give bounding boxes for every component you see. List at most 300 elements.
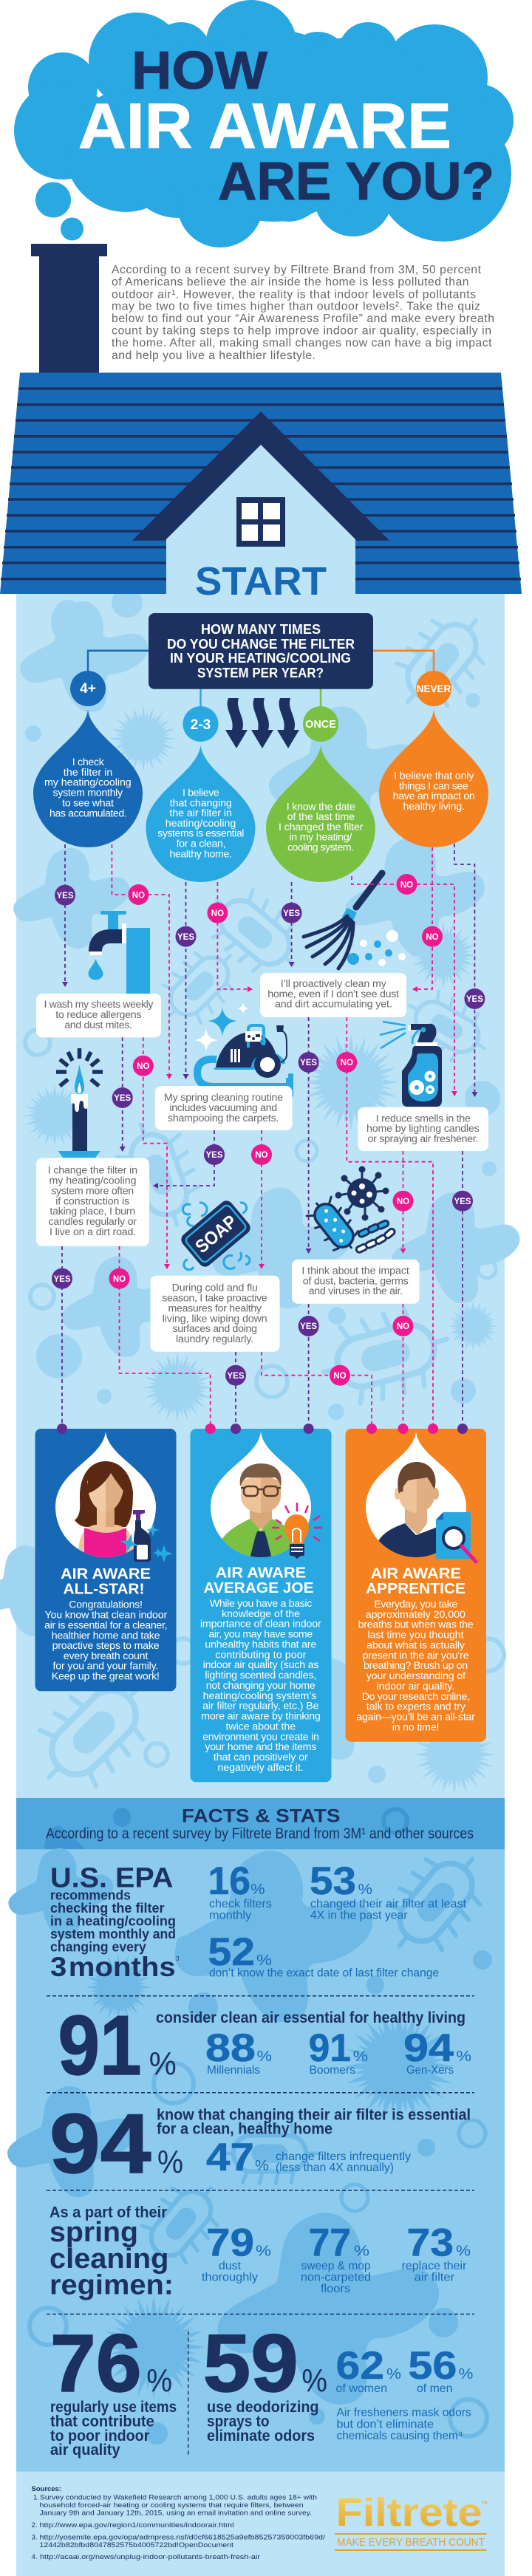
connector: 2-3 no [217,882,252,989]
stat: gen-xers: 94 [403,2026,454,2070]
stat: 77 percent sweep: 77 [309,2221,351,2264]
connector end dots [57,1424,468,1434]
panel: air aware all-star: healthier home and take [52,1630,160,1641]
stat: 94 percent know changing filter is essential: % [157,2144,183,2180]
badge: yes proactive [299,1052,319,1073]
card: change filter more often: taking place, I burn [50,1206,135,1217]
icon: man with glasses [222,1463,291,1557]
stat: 53 percent: % [358,1882,372,1898]
stat: millennials: 88 [205,2026,256,2070]
badge: no cold and flu: NO [333,1372,347,1381]
stat: women and men: of men [417,2382,452,2395]
card: wash sheets: and dust mites. [64,1019,132,1031]
stat: boomers: Boomers [309,2064,355,2077]
stat: women and men: 56 [408,2344,457,2388]
stat: 77 percent sweep: floors [321,2283,350,2295]
intro text: According to a recent survey by Filtrete Brand from 3M, 50 percent [112,264,482,276]
flow: 4+: to see what [62,797,114,809]
panel: air aware average joe: air, you may have some [208,1629,313,1641]
panel: air aware average joe: contributing to poor [215,1649,307,1661]
question box [149,613,373,689]
sources: 2. [31,2521,38,2529]
stat: 94 percent know changing filter is essential: 94 [50,2097,151,2191]
panel: air aware apprentice: APPRENTICE [366,1581,466,1597]
flow: never: have an impact on [393,790,475,802]
flow: never: I believe that only [394,770,474,782]
badge: yes filter often: YES [53,1275,71,1284]
stat: 79 percent dust: % [256,2243,271,2259]
badge: no proactive [336,1052,357,1073]
stat: 79 percent dust: 79 [206,2221,254,2264]
card: proactively clean [260,973,406,1017]
cloud puff: small [61,217,83,241]
stat: 73 percent replace: air filter [415,2271,455,2284]
flow: once: of the last time [287,811,355,823]
question box: DO YOU CHANGE THE FILTER [167,636,355,652]
flow: never: NEVER [417,683,451,694]
panel: air aware average joe [191,1429,331,1782]
stat: 59 percent: 59 [203,2318,299,2409]
connector: smells no [402,1151,403,1253]
flow: never: healthy living. [403,801,465,813]
panel: air aware average joe: twice about the [226,1721,296,1732]
panel: air aware average joe: lighting scented candles, [205,1670,316,1681]
panel: air aware average joe: heating/cooling system’s [203,1690,316,1702]
stat: women and men: but don’t eliminate [337,2418,434,2430]
stat: epa recommendation: in a heating/cooling [50,1914,176,1929]
badge: no cold and flu [330,1365,350,1386]
badge: yes sheets [112,1087,133,1108]
badge: yes 4+ [55,885,75,906]
intro text: of Americans believe the air inside the home is less polluted than [112,276,468,289]
card: reduce smells: I reduce smells in the [376,1113,471,1125]
stat: women and men: % [459,2366,474,2382]
question box: HOW MANY TIMES [201,621,321,637]
card: cold and flu: During cold and flu [172,1282,258,1294]
badge: no spring [251,1144,272,1165]
stat: gen-xers [403,2026,471,2077]
panel: air aware average joe: environment you create in [202,1731,319,1743]
stat: 91 percent consider clean air essential: % [149,2046,177,2082]
flow: 4+: has accumulated. [50,807,127,819]
panel: air aware apprentice [346,1429,486,1742]
panel: air aware all-star: You know that clean indoor [44,1610,167,1622]
card: think about impact: of dust, bacteria, germs [303,1275,409,1287]
stat: 79 percent dust: thoroughly [202,2271,258,2284]
panel: air aware apprentice: talk to experts and try [366,1701,466,1713]
stat: 53 percent: 4X in the past year [310,1910,408,1922]
stat: 91 percent consider clean air essential [58,1999,471,2093]
card: reduce smells: or spraying air freshener. [368,1133,479,1145]
stat: gen-xers: % [457,2049,471,2065]
panel: air aware average joe: not changing your home [206,1680,316,1692]
stat: 47 percent: 47 [206,2136,254,2179]
panel: air aware all-star: for you and your family. [53,1661,158,1673]
flow: 2-3: 2-3 [191,717,211,733]
flow: 4+: system monthly [53,788,123,799]
start label: START [195,559,327,604]
connector: think no [402,1304,403,1428]
icon: soap: SOAP [191,1211,241,1257]
stat: epa recommendation: checking the filter [50,1901,165,1916]
flow: never: things I can see [399,780,468,792]
panel: air aware apprentice: breathing? Brush up on [364,1660,468,1672]
card: change filter more often: my heating/cooling [49,1175,136,1187]
badge: yes spring [204,1144,225,1165]
panel: air aware average joe: indoor air quality (such as [203,1659,319,1671]
stat: 47 percent: change filters infrequently [276,2150,411,2163]
card: spring cleaning: includes vacuuming and [169,1102,277,1114]
panel: air aware apprentice: in no time! [392,1721,439,1733]
icon: young man [378,1462,439,1557]
icon: document and magnifier [436,1512,476,1562]
badge: no never [422,926,443,947]
panel: air aware all-star: AIR AWARE [61,1566,151,1582]
badge: yes think: YES [300,1322,317,1331]
stat: 16 percent: % [250,1882,265,1898]
stat: 59 percent: % [301,2363,327,2399]
badge: no 4+: NO [132,891,145,900]
flow: once: I changed the filter [279,821,364,833]
card: cold and flu: laundry regularly. [176,1333,253,1345]
stat: 76 percent: to poor indoor [50,2428,149,2445]
stat: boomers: % [353,2049,368,2065]
badge: no spring: NO [255,1151,268,1160]
card: proactively clean: I’ll proactively clean my [281,978,387,990]
panel: air aware all-star [35,1429,176,1691]
stat: 77 percent sweep: % [354,2243,369,2259]
stat: 94 percent know changing filter is essential: for a clean, healthy home [157,2120,332,2137]
flow: once: in my heating/ [289,832,352,844]
card: wash sheets: I wash my sheets weekly [44,999,154,1011]
connector: cold and flu no [262,1352,372,1428]
card: cold and flu: surfaces and doing [173,1323,257,1335]
stats background germs [7,1836,500,2445]
stat: 52 percent: don’t know the exact date of last filter change [209,1967,439,1980]
title: ARE YOU? [218,152,494,211]
panel: air aware average joe: knowledge of the [222,1608,300,1620]
sources: 12442b82bfbd8047852575b4005722bd!OpenDocument [40,2541,233,2549]
panel: air aware average joe: importance of clean indoor [200,1619,321,1630]
flow: once [266,706,375,882]
stat: 16 percent: 16 [208,1859,250,1903]
stat: epa recommendation [50,1862,180,1982]
connector: once yes [291,882,293,966]
flow: 2-3 [146,706,256,882]
card: reduce smells: home by lighting candles [366,1123,480,1135]
icon: broom [304,873,406,968]
connector: spring no [261,1130,262,1268]
flow: 4+: my heating/cooling [44,777,132,789]
icon: soap [179,1198,253,1270]
title [78,41,494,211]
stat: millennials: % [257,2049,272,2065]
panel: air aware apprentice: breaths but when was the [358,1619,474,1631]
connector: cold and flu yes [235,1352,236,1428]
stat: 47 percent: % [255,2158,269,2174]
panel: air aware all-star: proactive steps to make [52,1640,160,1652]
question box: SYSTEM PER YEAR? [197,665,324,680]
badge: yes smells: YES [454,1198,471,1206]
stat: 76 percent [50,2318,177,2459]
panel: air aware average joe: that can positively or [214,1752,308,1763]
connector: think yes [308,1304,310,1428]
stat: epa recommendation: system monthly and [50,1927,176,1941]
facts and stats band: According to a recent survey by Filtrete Brand from 3M¹ and other sources [46,1825,474,1842]
badge: no filter often [109,1268,130,1289]
stat: 52 percent: 52 [208,1930,255,1974]
badge: no never: NO [426,933,439,942]
badge: no think: NO [397,1322,409,1331]
stat: women and men: % [386,2366,401,2382]
icon: faucet [89,911,150,994]
intro text: may be two to five times higher than outdoor levels². Take the quiz [112,301,480,313]
panel: air aware all-star: ALL-STAR! [64,1582,145,1598]
connector: never no [413,847,432,989]
stat: 91 percent consider clean air essential: 91 [58,1999,142,2093]
panel: air aware all-star: Congratulations! [69,1599,143,1611]
stat: 53 percent: changed their air filter at least [310,1898,467,1910]
card: think about impact [292,1260,420,1304]
gable roof [132,411,389,541]
intro text: outdoor air¹. However, the reality is that indoor levels of pollutants [112,288,476,301]
stat: 94 percent know changing filter is essential [50,2097,471,2191]
connector: sheets no [143,1037,167,1268]
flow: 4+: the filter in [64,767,112,779]
stat: spring cleaning heading: cleaning [50,2244,168,2275]
flow: 2-3: systems is essential [157,828,244,840]
stat: 59 percent: sprays to [207,2413,269,2430]
flow: 4+: 4+ [80,681,96,697]
panel: air aware apprentice: Everyday, you take [374,1599,457,1610]
icon: wavy air arrows [225,698,299,748]
panel: stats background [16,1849,505,2472]
stat: 73 percent replace: 73 [406,2221,454,2264]
card: spring cleaning: My spring cleaning routine [164,1092,283,1104]
connector: proactive no [347,1017,433,1428]
panel: air aware apprentice: AIR AWARE [371,1566,461,1582]
icon: vacuum [194,1002,293,1097]
panel: air aware apprentice: about what is actually [366,1640,466,1652]
flow: 4+: I check [72,756,105,768]
card: wash sheets [36,994,161,1037]
stat: epa recommendation: 3 [176,1955,180,1962]
stat: 47 percent [206,2136,411,2179]
panel: air aware apprentice: last time you thought [368,1630,464,1641]
panel: air aware average joe: unhealthy habits that are [205,1639,316,1650]
card: think about impact: and viruses in the air. [309,1285,403,1297]
connector: proactive yes [308,1017,310,1253]
flow: never [379,671,488,847]
stat: 91 percent consider clean air essential: consider clean air essential for healthy living [156,2009,466,2026]
stat: 79 percent dust: dust [219,2260,242,2272]
icon: cleaning spray and stars [117,1510,173,1562]
badge: yes never [464,988,485,1009]
flow: once: ONCE [305,719,336,731]
intro text: below to find out your “Air Awareness Profile” and make every breath [112,312,494,325]
badge: yes 4+: YES [56,892,74,901]
stat: spring cleaning heading: spring [50,2217,138,2248]
panel: air aware average joe: air filter regularly, etc.) Be [202,1701,319,1712]
branch connectors [88,651,434,709]
stat: 59 percent: eliminate odors [207,2428,315,2445]
sources: http://yosemite.epa.gov/opa/admpress.nsf/d0cf6618525a9efb85257359003fb69d/ [40,2534,325,2542]
stat: women and men: chemicals causing them⁴ [337,2430,463,2442]
logo: filtrete [335,2490,488,2551]
badge: yes cold and flu [225,1365,246,1386]
icon: spray bottle [380,1022,442,1107]
connector: 2-3 yes [185,882,186,1079]
badge: yes once [282,903,302,923]
stat: 52 percent: % [256,1953,272,1969]
gable front [166,445,355,594]
badge: yes 2-3 [176,926,197,947]
stat: spring cleaning heading: regimen: [50,2269,174,2300]
badge: no smells [393,1191,414,1212]
sources: Survey conducted by Wakefield Research among 1,000 U.S. adults ages 18+ with [40,2494,317,2502]
badge: no sheets [133,1056,154,1076]
card: cold and flu: season, I take proactive [162,1293,267,1305]
question box: IN YOUR HEATING/COOLING [170,650,351,666]
connector: sheets yes [122,1037,123,1151]
panel: air aware apprentice: again—you’ll be an all-star [356,1712,475,1723]
logo: filtrete: TM [481,2501,488,2506]
stat: 76 percent: that contribute [50,2413,154,2430]
stat: 94 percent know changing filter is essential: know that changing their air filter is essential [157,2106,471,2123]
panel: air aware average joe: more air aware by thinking [201,1711,321,1723]
card: spring cleaning: shampooing the carpets. [168,1113,279,1124]
stat: women and men: Air fresheners mask odors [337,2407,471,2419]
facts and stats band: FACTS & STATS [182,1806,340,1827]
icon: window [236,497,285,547]
sources: 3. [31,2534,38,2542]
connector: spring yes [154,1130,214,1186]
icon: light bulb [272,1503,322,1559]
flow: 2-3: that changing [170,797,232,809]
card: change filter more often: I live on a dirt road. [50,1226,136,1238]
stat: 77 percent sweep: non-carpeted [301,2271,371,2284]
stat: 77 percent sweep: sweep & mop [301,2260,371,2272]
icon: candle [56,1048,103,1158]
panel: air aware apprentice: your understanding of [366,1670,466,1682]
stat: 59 percent: use deodorizing [207,2399,319,2416]
stat: epa recommendation: 3 months [50,1952,176,1982]
title: HOW [132,41,267,100]
badge: no once [396,874,417,895]
stat: 76 percent: % [146,2363,172,2399]
badge: yes never: YES [466,995,483,1004]
connector: once no [352,876,454,1096]
roof [0,372,522,604]
card: change filter more often: candles regularly or [49,1216,137,1228]
panel: air aware all-star: Keep up the great work! [52,1671,160,1683]
cloud puff: medium [35,182,71,217]
badge: no sheets: NO [137,1062,149,1071]
stat: 47 percent: (less than 4X annually) [276,2162,394,2174]
flow: 2-3: healthy home. [169,848,232,860]
stat: epa recommendation: recommends [50,1888,131,1903]
stat: 76 percent: 76 [50,2318,142,2409]
connector: filter often yes [61,1246,63,1428]
flow: 4+ [33,671,143,847]
stat: spring cleaning heading: As a part of their [50,2204,167,2221]
sources [31,2485,325,2561]
badge: no 2-3 [207,903,228,923]
stat: 73 percent replace: % [456,2243,471,2259]
panel: air aware all-star: every breath count [64,1650,148,1662]
stat: 79 percent dust [202,2221,271,2284]
stat: boomers: 91 [309,2026,351,2070]
card: change filter more often: if construction is [55,1195,129,1207]
card: wash sheets: to reduce allergens [55,1009,142,1021]
stat: epa recommendation: U.S. EPA [50,1862,173,1893]
background germ pattern [0,588,520,1805]
intro text: the home. After all, making small changes now can have a big impact [112,337,492,349]
card: proactively clean: and dirt accumulating yet. [275,999,392,1011]
panel: house body [16,594,505,2576]
stat: spring cleaning heading [50,2204,174,2300]
stat: 16 percent: monthly [209,1910,251,1922]
card: spring cleaning [155,1086,293,1130]
panel: air aware average joe: negatively affect it. [217,1762,304,1774]
stat: 73 percent replace [402,2221,471,2284]
stat: 76 percent: air quality [50,2442,120,2459]
card: proactively clean: home, even if I don’t see dust [267,988,399,1000]
connector: 4+ no [112,844,169,1079]
badge: yes spring: YES [205,1151,223,1160]
badge: yes think [299,1316,319,1336]
card: change filter more often: system more often [51,1185,134,1197]
connector: filter often no [120,1246,211,1428]
icon: germs [304,1167,396,1257]
yes and no badges [52,874,485,1386]
stat: millennials: Millennials [207,2064,260,2077]
panel: air aware average joe: While you have a basic [210,1598,312,1610]
badge: no proactive: NO [341,1059,353,1067]
badge: no smells: NO [397,1198,409,1206]
badge: yes sheets: YES [114,1094,132,1103]
stat: 52 percent [208,1930,439,1980]
stat: epa recommendation: changing every [50,1939,146,1954]
badge: no 4+ [128,884,149,905]
stat: 16 percent [208,1859,272,1922]
sources: January 9th and January 12th, 2015, using an email invitation and online survey. [40,2510,312,2518]
facts and stats band [16,1798,505,1849]
card: cold and flu [151,1276,279,1352]
card: change filter more often: I change the filter in [48,1165,137,1177]
card: think about impact: I think about the impact [301,1265,409,1277]
panel: air aware apprentice: approximately 20,000 [366,1609,466,1621]
logo: filtrete: MAKE EVERY BREATH COUNT [337,2537,485,2549]
sources: 4. [31,2553,38,2561]
card: cold and flu: measures for healthy [168,1302,262,1314]
stat: gen-xers: Gen-Xers [406,2064,454,2077]
stat: 76 percent: regularly use items [50,2399,177,2416]
stat: women and men [335,2344,474,2442]
badge: no filter often: NO [113,1275,126,1284]
card: reduce smells [358,1107,488,1151]
logo: filtrete: Filtrete [335,2490,482,2535]
stat: boomers [309,2026,368,2077]
badge: yes filter often [52,1268,72,1289]
intro text [112,264,494,362]
flow: 2-3: for a clean, [177,838,226,850]
stat: 53 percent [310,1859,467,1922]
stat: 73 percent replace: replace their [402,2260,467,2272]
stat: millennials [205,2026,272,2077]
card: cold and flu: living, like wiping down [163,1313,267,1325]
sources: Sources: [31,2485,61,2493]
